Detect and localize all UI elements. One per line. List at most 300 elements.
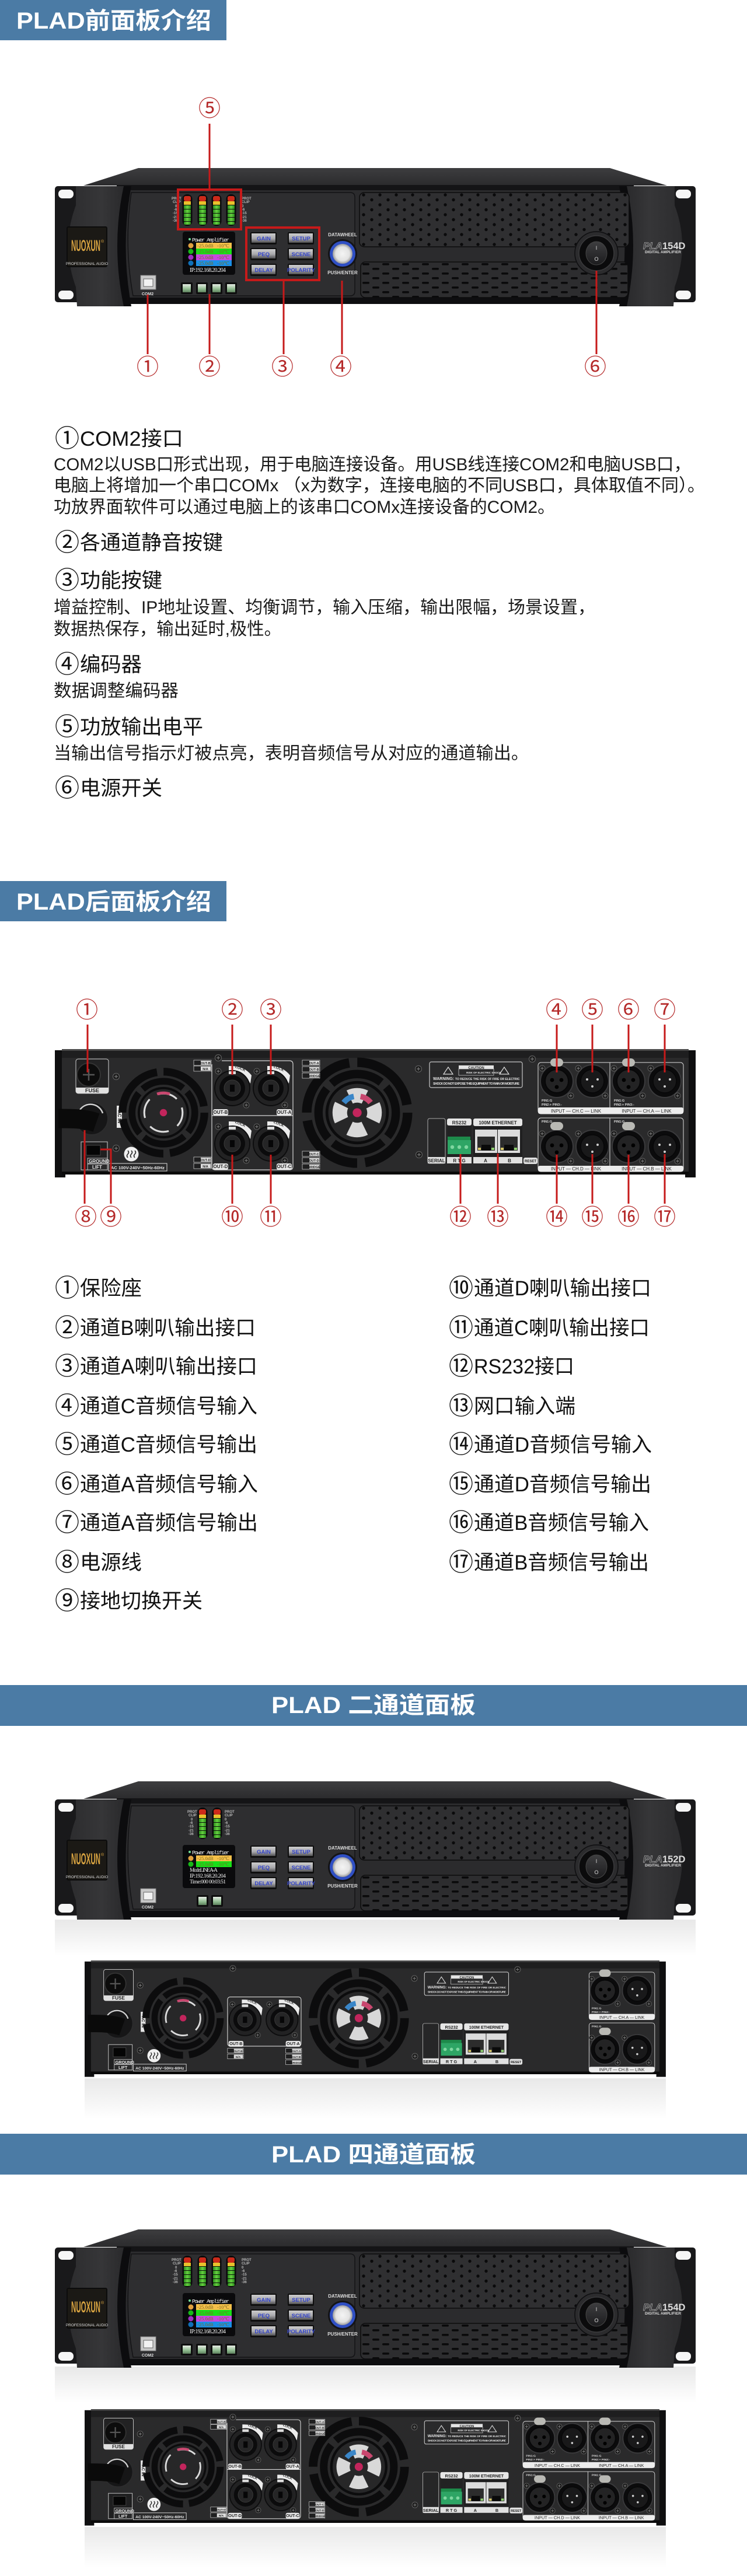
- two-channel front panel: COM2: [142, 1906, 153, 1910]
- two-channel front panel: -6: [190, 1822, 193, 1825]
- amplifier rear panel 4-channel: RS232: [452, 1120, 467, 1126]
- speaker output connectors: OUT-D: [200, 1159, 211, 1162]
- item 6 power switch: [55, 768, 162, 804]
- speaker output connectors: OUT-D: [315, 2509, 324, 2512]
- two-channel front panel: 0: [225, 1818, 227, 1822]
- item 3 function keys: [54, 561, 595, 639]
- XLR input and link connectors: PIN2:+ PIN3:-: [526, 2458, 544, 2462]
- XLR input and link connectors: INPUT — CH.A — LINK: [599, 2463, 644, 2468]
- four-channel front panel: -10℃: [217, 2316, 229, 2322]
- item 5 output level: 当输出信号指示灯被点亮，表明音频信号从对应的通道输出。: [54, 744, 529, 763]
- four-channel rear panel: R T G: [446, 2508, 458, 2513]
- two-channel front panel: SCENE: [292, 1865, 310, 1871]
- two-channel front panel: -10℃: [217, 1861, 229, 1867]
- callouts 8-17 bottom: ⑮: [581, 1199, 603, 1231]
- four-channel rear panel: CAUTION: [459, 2425, 474, 2428]
- four-channel front panel: GAIN: [257, 2297, 271, 2304]
- four-channel front panel: SCENE: [292, 2313, 310, 2319]
- two-channel front panel: -15: [225, 1825, 230, 1829]
- four-channel rear panel: GROUND: [116, 2508, 134, 2514]
- speaker output connectors: N/A: [236, 2056, 241, 2059]
- amplifier rear panel 4-channel: 100M ETHERNET: [479, 1120, 517, 1126]
- speaker output connectors: BRIDGE: [314, 2515, 326, 2518]
- legend 3: 通道A喇叭输出接口: [80, 1355, 257, 1378]
- amplifier rear panel 4-channel: LIFT: [92, 1165, 102, 1170]
- speaker output connectors: N/A: [203, 1165, 208, 1169]
- amplifier front panel 4-channel: -15: [242, 212, 247, 215]
- callout 4: ④: [330, 349, 352, 381]
- amplifier front panel 4-channel: -25.0dB: [197, 243, 214, 249]
- amplifier front panel 4-channel: -25.0dB: [197, 254, 214, 260]
- amplifier front panel 4-channel: -6: [242, 208, 245, 212]
- speaker output connectors: OUT-A: [292, 2050, 301, 2053]
- amplifier front panel 4-channel: PROFESSIONAL AUDIO: [66, 262, 108, 266]
- speaker output connectors: OUT-A: [286, 2464, 299, 2469]
- amplifier front panel 4-channel: CLIP: [173, 201, 181, 204]
- amplifier front panel 4-channel: PROT: [242, 197, 252, 201]
- legend 16: 通道B音频信号输入: [474, 1512, 649, 1535]
- callout 5: ⑤: [198, 90, 221, 123]
- callout 2: ②: [198, 349, 221, 381]
- item 4 encoder: [54, 645, 179, 701]
- XLR input and link connectors: PIN2:+ PIN3:-: [542, 1103, 562, 1107]
- legend 12: RS232接口: [474, 1355, 574, 1378]
- two-channel rear panel: A: [474, 2059, 477, 2064]
- XLR input and link connectors: INPUT — CH.A — LINK: [622, 1109, 672, 1114]
- two-channel front panel: NUOXUN: [71, 1850, 100, 1868]
- legend 15: ⑮: [449, 1464, 473, 1500]
- speaker output connectors: OUT-C: [277, 1164, 292, 1169]
- callouts 8-17 bottom: ⑬: [487, 1199, 509, 1231]
- legend 11: ⑪: [449, 1308, 473, 1344]
- amplifier front panel 4-channel: -21: [173, 216, 178, 219]
- four-channel front panel: DATAWHEEL: [328, 2294, 357, 2299]
- four-channel front panel: ®: [101, 2301, 104, 2305]
- two-channel front panel: 0: [191, 1818, 193, 1822]
- callout 3: ③: [271, 349, 294, 381]
- speaker output connectors: LOCK: [282, 2424, 293, 2431]
- legend 1: ①: [55, 1268, 79, 1304]
- four-channel front panel: COM2: [142, 2354, 153, 2358]
- banner: four-channel panel: [0, 2134, 747, 2175]
- amplifier front panel 4-channel: GAIN: [257, 236, 271, 242]
- four-channel front panel: -15: [242, 2273, 247, 2277]
- legend 9: 接地切换开关: [80, 1590, 203, 1613]
- four-channel front panel: POLARITY: [287, 2329, 316, 2335]
- amplifier rear panel 4-channel: AC IN: [117, 1110, 122, 1123]
- two-channel rear panel: FUSE: [112, 1995, 125, 2001]
- four-channel front panel: -36: [173, 2281, 178, 2284]
- four-channel front panel: IP:192.168.20.204: [190, 2329, 226, 2335]
- amplifier rear panel 4-channel: [55, 1049, 696, 1177]
- speaker output connectors: OUT-B: [228, 2464, 242, 2469]
- legend 13: 网口输入端: [474, 1395, 575, 1418]
- amplifier front panel 4-channel: -10℃: [217, 243, 229, 249]
- callouts 8-17 bottom: ⑯: [617, 1199, 640, 1231]
- item 1 COM2 port: COM2接口: [80, 428, 183, 450]
- speaker output connectors: LOCK: [235, 1065, 246, 1072]
- amplifier front panel 4-channel: -36: [173, 219, 178, 223]
- two-channel front panel: O: [594, 1869, 599, 1875]
- banner: four-channel panel: PLAD 四通道面板: [271, 2142, 476, 2168]
- four-channel front panel: PEQ: [258, 2313, 270, 2319]
- front panel description list: [54, 419, 705, 804]
- two-channel rear panel: B: [495, 2059, 498, 2064]
- callouts 8-17 bottom: ⑧: [75, 1199, 97, 1231]
- four-channel rear panel: RISK OF ELECTRIC SHOCK: [458, 2429, 489, 2432]
- four-channel front panel: SETUP: [292, 2297, 310, 2304]
- speaker output connectors: LOCK: [273, 1065, 285, 1072]
- four-channel rear panel: RESET: [511, 2509, 522, 2513]
- legend 1: [55, 1268, 142, 1304]
- four-channel rear panel: 100M ETHERNET: [469, 2473, 504, 2479]
- XLR input and link connectors: PIN1:G: [542, 1099, 552, 1103]
- legend 13: [449, 1386, 575, 1422]
- speaker output connectors: OUT-C: [286, 2513, 299, 2518]
- four-channel rear panel: B: [495, 2508, 498, 2513]
- two-channel front panel: CLIP: [189, 1814, 197, 1817]
- XLR input and link connectors: INPUT — CH.B — LINK: [599, 2515, 644, 2521]
- item 1 COM2 port: 功放界面软件可以通过电脑上的该串口COMx连接设备的COM2。: [54, 498, 555, 517]
- amplifier front panel 4-channel: -10℃: [217, 254, 229, 260]
- four-channel front panel: -25.0dB: [197, 2304, 214, 2310]
- two-channel front panel: DIGITAL AMPLIFIER: [645, 1864, 681, 1868]
- amplifier front panel 4-channel: -10℃: [217, 260, 229, 266]
- legend 17: [449, 1543, 649, 1578]
- two-channel front panel: CLIP: [225, 1814, 233, 1817]
- amplifier front panel 4-channel: -25.0dB: [197, 249, 214, 254]
- speaker output connectors: N/A: [219, 2514, 224, 2518]
- legend 5: ⑤: [55, 1425, 79, 1460]
- two-channel front panel: POLARITY: [287, 1881, 316, 1887]
- XLR input and link connectors: PIN2:+ PIN3:-: [614, 1103, 634, 1107]
- XLR input and link connectors: PIN1:G: [592, 2455, 602, 2458]
- callouts 1-7 top: [76, 992, 676, 1075]
- legend 9: ⑨: [55, 1581, 79, 1617]
- speaker output connectors: OUT-D: [309, 1159, 319, 1163]
- two-channel front panel: -10℃: [217, 1855, 229, 1861]
- four-channel rear panel: FUSE: [112, 2444, 125, 2449]
- item 5 output level: 功放输出电平: [80, 716, 203, 739]
- amplifier rear panel 4-channel: AC 100V-240V~50Hz-60Hz: [111, 1165, 165, 1170]
- item 5 output level: ⑤: [55, 707, 79, 743]
- amplifier front panel 4-channel: 0: [175, 205, 177, 208]
- amplifier front panel 4-channel: -10℃: [217, 249, 229, 254]
- four-channel front panel: -15: [173, 2273, 178, 2277]
- amplifier front panel 4-channel: [55, 168, 696, 306]
- rear panel diagram with callouts: [55, 992, 696, 1231]
- XLR input and link connectors: INPUT — CH.D — LINK: [535, 2515, 580, 2521]
- amplifier front panel 4-channel: PROT: [172, 197, 181, 201]
- heading: rear panel intro: PLAD后面板介绍: [16, 889, 211, 915]
- four-channel front panel: PROT: [242, 2259, 252, 2262]
- speaker output connectors: LOCK: [247, 1999, 258, 2006]
- two-channel front panel: PLA152D: [643, 1854, 686, 1865]
- amplifier rear panel 4-channel: CAUTION: [468, 1067, 484, 1070]
- two-channel front panel: PROT: [187, 1810, 197, 1814]
- item 6 power switch: ⑥: [55, 768, 79, 804]
- amplifier front panel 4-channel: PLA154D: [643, 241, 686, 251]
- callouts 8-17 bottom: ⑪: [260, 1199, 282, 1231]
- speaker output connectors: LOCK: [284, 1999, 295, 2006]
- callouts 8-17 bottom: ⑩: [221, 1199, 243, 1231]
- amplifier rear panel 4-channel: SERIAL: [428, 1158, 445, 1163]
- item 2 mute keys: ②: [55, 523, 79, 558]
- item 3 function keys: 数据热保存，输出延时,极性。: [54, 620, 281, 639]
- two-channel front panel: ®: [101, 1853, 104, 1857]
- two-channel rear panel: [85, 1960, 666, 2077]
- legend 10: [449, 1268, 651, 1304]
- speaker output connectors: OUT-D: [228, 2513, 242, 2518]
- two-channel front panel: -25.0dB: [197, 1855, 214, 1861]
- four-channel front panel: DELAY: [254, 2329, 273, 2335]
- four-channel front panel: -25.0dB: [197, 2316, 214, 2322]
- amplifier front panel 4-channel: NUOXUN: [71, 237, 100, 254]
- four-channel front panel: PLA154D: [643, 2302, 686, 2313]
- amplifier rear panel 4-channel: RISK OF ELECTRIC SHOCK: [466, 1071, 501, 1074]
- XLR input and link connectors: PIN1:G: [542, 1120, 552, 1124]
- legend 13: ⑬: [449, 1386, 473, 1422]
- legend 4: 通道C音频信号输入: [80, 1395, 257, 1418]
- amplifier front panel 4-channel: Power Amplifier: [192, 237, 229, 243]
- heading: rear panel intro: [0, 881, 226, 921]
- speaker output connectors: BRIDGE: [291, 2061, 302, 2065]
- banner: two-channel panel: PLAD 二通道面板: [271, 1693, 476, 1718]
- item 3 function keys: 增益控制、IP地址设置、均衡调节，输入压缩，输出限幅，场景设置，: [54, 598, 595, 617]
- amplifier front panel 4-channel: PUSH/ENTER: [327, 270, 358, 275]
- heading: front panel intro: PLAD前面板介绍: [16, 8, 211, 34]
- heading: front panel intro: [0, 0, 226, 40]
- legend 2: ②: [55, 1308, 79, 1344]
- two-channel rear panel: AC 100V-240V~50Hz-60Hz: [135, 2067, 184, 2071]
- four-channel front panel: DIGITAL AMPLIFIER: [645, 2312, 681, 2316]
- four-channel front panel: O: [594, 2318, 599, 2323]
- four-channel front panel: -6: [242, 2270, 245, 2273]
- two-channel front panel: DELAY: [254, 1881, 273, 1887]
- speaker output connectors: OUT-D: [214, 1164, 228, 1169]
- amplifier front panel 4-channel: -21: [242, 216, 247, 219]
- four-channel front panel: PROFESSIONAL AUDIO: [66, 2323, 108, 2327]
- four-channel front panel: NUOXUN: [71, 2298, 100, 2316]
- legend 17: ⑰: [449, 1543, 473, 1578]
- two-channel rear panel: RS232: [445, 2025, 458, 2030]
- amplifier front panel 4-channel: I: [596, 245, 597, 251]
- four-channel front panel: -10℃: [217, 2322, 229, 2327]
- speaker output connectors: OUT-B: [309, 1068, 319, 1072]
- speaker output connectors: BRIDGE: [308, 1075, 320, 1078]
- four-channel front panel: 0: [242, 2266, 244, 2270]
- two-channel front panel: Time:000 00:03:51: [190, 1879, 226, 1885]
- two-channel rear panel: R T G: [446, 2059, 458, 2064]
- amplifier rear panel 4-channel: SHOCK DO NOT EXPOSE THIS EQUIPMENT TO RAIN OR MOISTURE: [433, 1082, 519, 1086]
- legend 10: 通道D喇叭输出接口: [474, 1277, 651, 1300]
- speaker output connectors: LOCK: [282, 2474, 293, 2481]
- two-channel front panel: Mode:LINE A-A: [190, 1868, 218, 1874]
- legend 8: ⑧: [55, 1543, 79, 1578]
- legend 6: [55, 1464, 258, 1500]
- two-channel front panel: -21: [225, 1829, 230, 1833]
- item 6 power switch: 电源开关: [80, 777, 162, 800]
- XLR input and link connectors: PIN1:G: [614, 1099, 624, 1103]
- amplifier front panel 4-channel: DIGITAL AMPLIFIER: [645, 250, 681, 254]
- callouts 8-17 bottom: ⑫: [449, 1199, 472, 1231]
- callout 6: ⑥: [584, 349, 606, 381]
- speaker output connectors: OUT-D: [217, 2508, 226, 2512]
- callouts 8-17 bottom: ⑨: [100, 1199, 122, 1231]
- four-channel front panel: -21: [242, 2277, 247, 2281]
- item 1 COM2 port: 电脑上将增加一个串口COMx （x为数字，连接电脑的不同USB口，具体取值不同）。: [54, 476, 705, 495]
- callouts 1-7 top: ④: [546, 992, 568, 1024]
- callouts 1-7 top: ⑥: [617, 992, 640, 1024]
- two-channel rear panel: RESET: [511, 2061, 522, 2064]
- four-channel front panel: -21: [173, 2277, 178, 2281]
- speaker output connectors: OUT-B: [229, 2041, 243, 2046]
- speaker output connectors: N/A: [219, 2426, 224, 2430]
- four-channel front panel: CLIP: [173, 2262, 181, 2266]
- amplifier front panel 4-channel: -15: [173, 212, 178, 215]
- four-channel front panel: PUSH/ENTER: [327, 2332, 358, 2337]
- speaker output connectors: LOCK: [247, 2474, 258, 2481]
- amplifier rear panel 4-channel: WARNING:: [433, 1077, 454, 1081]
- legend 5: [55, 1425, 257, 1460]
- amplifier front panel 4-channel: POLARITY: [287, 267, 316, 274]
- amplifier front panel 4-channel: -6: [174, 208, 177, 212]
- four-channel front panel: -6: [174, 2270, 177, 2273]
- rear panel legend list: [55, 1268, 652, 1617]
- two-channel front panel: Power Amplifier: [192, 1850, 229, 1856]
- amplifier front panel 4-channel: COM2: [142, 292, 153, 296]
- two-channel front panel: PUSH/ENTER: [327, 1883, 358, 1889]
- item 4 encoder: 编码器: [80, 653, 142, 676]
- four-channel rear panel: WARNING:: [428, 2434, 446, 2438]
- legend 15: 通道D音频信号输出: [474, 1473, 651, 1496]
- four-channel rear panel: A: [474, 2508, 477, 2513]
- legend 2: 通道B喇叭输出接口: [80, 1317, 256, 1340]
- speaker output connectors: BRIDGE: [308, 1166, 320, 1169]
- item 1 COM2 port: [54, 419, 705, 517]
- two-channel front panel: IP:192.168.20.204: [190, 1874, 226, 1879]
- four-channel rear panel: AC IN: [141, 2465, 146, 2476]
- XLR input and link connectors: INPUT — CH.C — LINK: [535, 2463, 580, 2468]
- four-channel rear panel: RS232: [445, 2473, 458, 2479]
- legend 6: ⑥: [55, 1464, 79, 1500]
- two-channel front panel: DATAWHEEL: [328, 1846, 357, 1851]
- amplifier front panel 4-channel: PEQ: [258, 251, 270, 258]
- XLR input and link connectors: PIN1:G: [592, 2007, 602, 2010]
- four-channel front panel: I: [596, 2306, 597, 2312]
- legend 7: [55, 1503, 258, 1539]
- two-channel rear panel: 100M ETHERNET: [469, 2025, 504, 2030]
- four-channel rear panel: TO REDUCE THE RISK OF FIRE OR ELECTRIC: [448, 2435, 507, 2438]
- amplifier front panel 4-channel: -25.0dB: [197, 260, 214, 266]
- XLR input and link connectors: INPUT — CH.B — LINK: [622, 1166, 672, 1172]
- two-channel front panel: -21: [189, 1829, 194, 1833]
- four-channel rear panel: LIFT: [118, 2514, 128, 2519]
- speaker output connectors: [211, 2419, 326, 2519]
- XLR input and link connectors: PIN1:G: [592, 2025, 602, 2028]
- speaker output connectors: OUT-B: [214, 1110, 228, 1115]
- two-channel rear panel: SERIAL: [423, 2059, 439, 2064]
- two-channel rear panel: LIFT: [118, 2065, 128, 2070]
- speaker output connectors: OUT-A: [277, 1110, 292, 1115]
- four-channel front panel: -36: [242, 2281, 247, 2284]
- two-channel front panel: PROT: [225, 1810, 235, 1814]
- legend 7: 通道A音频信号输出: [80, 1512, 258, 1535]
- callout 3: [246, 228, 319, 381]
- speaker output connectors: OUT-A: [309, 1062, 319, 1065]
- amplifier rear panel 4-channel: B: [508, 1158, 511, 1163]
- speaker output connectors: [228, 1997, 302, 2065]
- item 1 COM2 port: COM2以USB口形式出现，用于电脑连接设备。用USB线连接COM2和电脑USB口，: [54, 455, 691, 474]
- legend 15: [449, 1464, 651, 1500]
- amplifier front panel 4-channel: O: [594, 256, 599, 262]
- legend 14: [449, 1425, 652, 1460]
- callouts 1-7 top: ③: [260, 992, 282, 1024]
- speaker output connectors: OUT-C: [315, 2503, 324, 2507]
- four-channel front panel: -25.0dB: [197, 2322, 214, 2327]
- amplifier rear panel 4-channel: A: [484, 1158, 487, 1163]
- two-channel front panel: -25.0dB: [197, 1861, 214, 1867]
- legend 11: [449, 1308, 650, 1344]
- speaker output connectors: [194, 1060, 320, 1170]
- speaker output connectors: N/A: [203, 1068, 208, 1071]
- two-channel front panel: -36: [189, 1833, 194, 1836]
- legend 1: 保险座: [80, 1277, 142, 1300]
- legend 4: [55, 1386, 257, 1422]
- four-channel front panel: -10℃: [217, 2310, 229, 2316]
- legend 4: ④: [55, 1386, 79, 1422]
- legend 16: ⑯: [449, 1503, 473, 1539]
- two-channel front panel: PROFESSIONAL AUDIO: [66, 1875, 108, 1879]
- XLR input and link connectors: INPUT — CH.C — LINK: [551, 1109, 602, 1114]
- legend 14: 通道D音频信号输入: [474, 1434, 652, 1456]
- XLR input and link connectors: PIN1:G: [614, 1120, 624, 1124]
- XLR input and link connectors: PIN1:G: [526, 2455, 536, 2458]
- two-channel rear panel: TO REDUCE THE RISK OF FIRE OR ELECTRIC: [448, 1986, 507, 1989]
- two-channel front panel: -15: [189, 1825, 194, 1829]
- two-channel front panel: SETUP: [292, 1849, 310, 1855]
- four-channel front panel: 0: [175, 2266, 177, 2270]
- amplifier rear panel 4-channel: GROUND: [89, 1159, 110, 1164]
- item 1 COM2 port: ①: [55, 419, 79, 455]
- item 5 output level: [54, 707, 529, 763]
- legend 6: 通道A音频信号输入: [80, 1473, 258, 1496]
- two-channel rear panel: AC IN: [141, 2016, 146, 2028]
- amplifier front panel 4-channel: IP:192.168.20.204: [190, 267, 226, 274]
- amplifier rear panel 4-channel: FUSE: [85, 1088, 99, 1093]
- legend 8: [55, 1543, 142, 1578]
- XLR input and link connectors: [538, 1058, 683, 1172]
- two-channel rear panel: CAUTION: [459, 1976, 474, 1980]
- XLR input and link connectors: PIN2:+ PIN3:-: [592, 2011, 610, 2014]
- callouts 1-7 top: ⑦: [654, 992, 676, 1024]
- callouts 8-17 bottom: ⑰: [654, 1199, 676, 1231]
- item 3 function keys: 功能按键: [80, 569, 162, 592]
- XLR input and link connectors: PIN1:G: [526, 2473, 536, 2477]
- legend 12: ⑫: [449, 1347, 473, 1382]
- two-channel rear panel: GROUND: [116, 2060, 134, 2065]
- four-channel front panel: -25.0dB: [197, 2310, 214, 2316]
- four-channel front panel: Power Amplifier: [192, 2298, 229, 2305]
- item 4 encoder: ④: [55, 645, 79, 680]
- legend 10: ⑩: [449, 1268, 473, 1304]
- XLR input and link connectors: PIN2:+ PIN3:-: [592, 2458, 610, 2462]
- amplifier rear panel 4-channel: TO REDUCE THE RISK OF FIRE OR ELECTRIC: [455, 1078, 520, 1081]
- amplifier front panel 4-channel: SETUP: [292, 236, 310, 242]
- legend 2: [55, 1308, 256, 1344]
- amplifier front panel 4-channel: DELAY: [254, 267, 273, 274]
- speaker output connectors: LOCK: [235, 1120, 246, 1128]
